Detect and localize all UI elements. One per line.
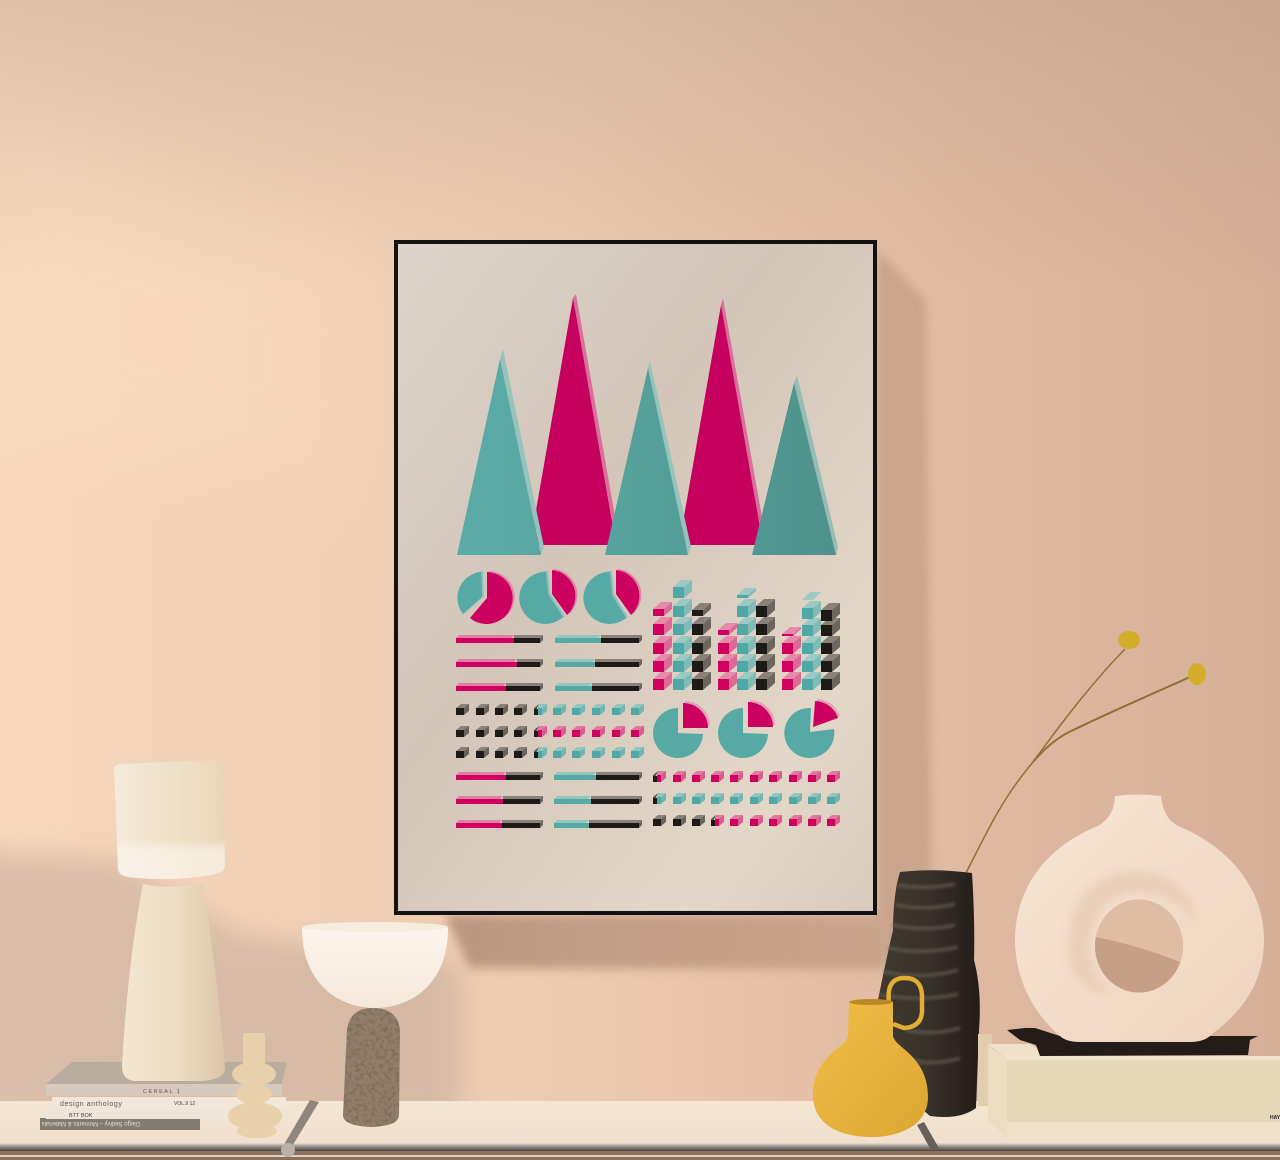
book 2: design anthology: [60, 1101, 123, 1108]
donut hole: [1095, 900, 1183, 992]
teal cone 3: [752, 375, 838, 555]
progress bars upper: [456, 635, 642, 691]
marble lamp: [302, 922, 448, 1127]
book 4: Diego Sedivy – Moments & Materials: [42, 1120, 140, 1126]
pie charts row 1: [457, 569, 641, 624]
bar lower right 1: [554, 772, 642, 780]
pink cone 1: [530, 294, 620, 545]
cone chart: [457, 294, 838, 555]
box lower tier: [1007, 1122, 1280, 1139]
box front: [1007, 1060, 1280, 1122]
book 3: [46, 1109, 286, 1119]
pie charts row 2: [653, 699, 840, 758]
shelf joint left: [281, 1143, 295, 1157]
lamp bowl: [302, 924, 448, 1008]
bar lower right 3: [554, 820, 642, 828]
poster frame: [394, 240, 877, 915]
stack group 2: [718, 588, 775, 690]
donut vase body: [1015, 794, 1264, 1042]
pie 5: [718, 700, 775, 758]
stacked boxes: HAY: [1270, 1115, 1280, 1121]
vase base cone: [122, 883, 225, 1081]
bar upper left 1: [456, 635, 543, 643]
book 2: [52, 1097, 286, 1109]
bar lower right 2: [554, 796, 642, 804]
black tray: [1007, 1028, 1258, 1056]
donut vase: [1015, 794, 1264, 1042]
bowl rim: [302, 922, 448, 932]
bar upper right 1: [555, 635, 642, 643]
small beige vase: [228, 1033, 282, 1138]
bar upper left 3: [456, 683, 543, 691]
book stack: [40, 1062, 287, 1130]
teal cone 1: [457, 349, 544, 555]
flower head 2: [1188, 663, 1206, 685]
yellow jug: [813, 978, 928, 1137]
bar upper right 3: [555, 683, 642, 691]
box top: [988, 1044, 1280, 1060]
box side: [988, 1045, 1007, 1138]
stack group 1: [653, 580, 711, 690]
vase cup: [114, 762, 225, 879]
book 1: CEREAL 1: [143, 1089, 181, 1095]
poster paper: [398, 244, 873, 911]
pink cone 2: [679, 298, 767, 545]
pie 1: [457, 571, 515, 624]
tall cream vase: [114, 762, 225, 1081]
pie 6: [784, 699, 840, 758]
pie 2: [519, 569, 577, 624]
stacked boxes: [978, 1034, 1280, 1139]
bar lower left 3: [456, 820, 543, 828]
marble base: [343, 1008, 400, 1127]
flower head 1: [1118, 631, 1140, 649]
inner rim shading: [1068, 870, 1197, 996]
shelf tube right: [917, 1122, 940, 1150]
teal cone 2: [605, 361, 691, 555]
jug body: [813, 999, 928, 1137]
poster: [394, 240, 877, 915]
stem 1: [966, 649, 1125, 873]
stack group 3: [782, 592, 840, 690]
stem 2: [1033, 677, 1190, 762]
bar upper left 2: [456, 659, 543, 667]
book 2: VOL.9 12: [174, 1101, 195, 1107]
book 4: [40, 1118, 200, 1130]
small cube grid right: [653, 771, 840, 826]
book 1: [46, 1084, 282, 1096]
small cube grid left: [456, 704, 644, 758]
black textured vase: [878, 870, 980, 1117]
shelf: [0, 1100, 1280, 1160]
pie 3: [583, 569, 641, 624]
pie 4: [653, 701, 710, 758]
bar lower left 2: [456, 796, 543, 804]
isometric stacked cube chart: [653, 580, 840, 690]
jug lip: [849, 999, 893, 1005]
shelf tube left: [282, 1100, 319, 1148]
back box: [978, 1034, 992, 1106]
bar upper right 2: [555, 659, 642, 667]
book cover top: [46, 1062, 287, 1090]
progress bars lower: [456, 772, 642, 828]
jug handle: [889, 978, 922, 1028]
book 3: BTT BOK: [69, 1113, 93, 1119]
bar lower left 1: [456, 772, 543, 780]
poster shadow on wall: [445, 250, 932, 970]
dried flowers: [966, 631, 1206, 873]
